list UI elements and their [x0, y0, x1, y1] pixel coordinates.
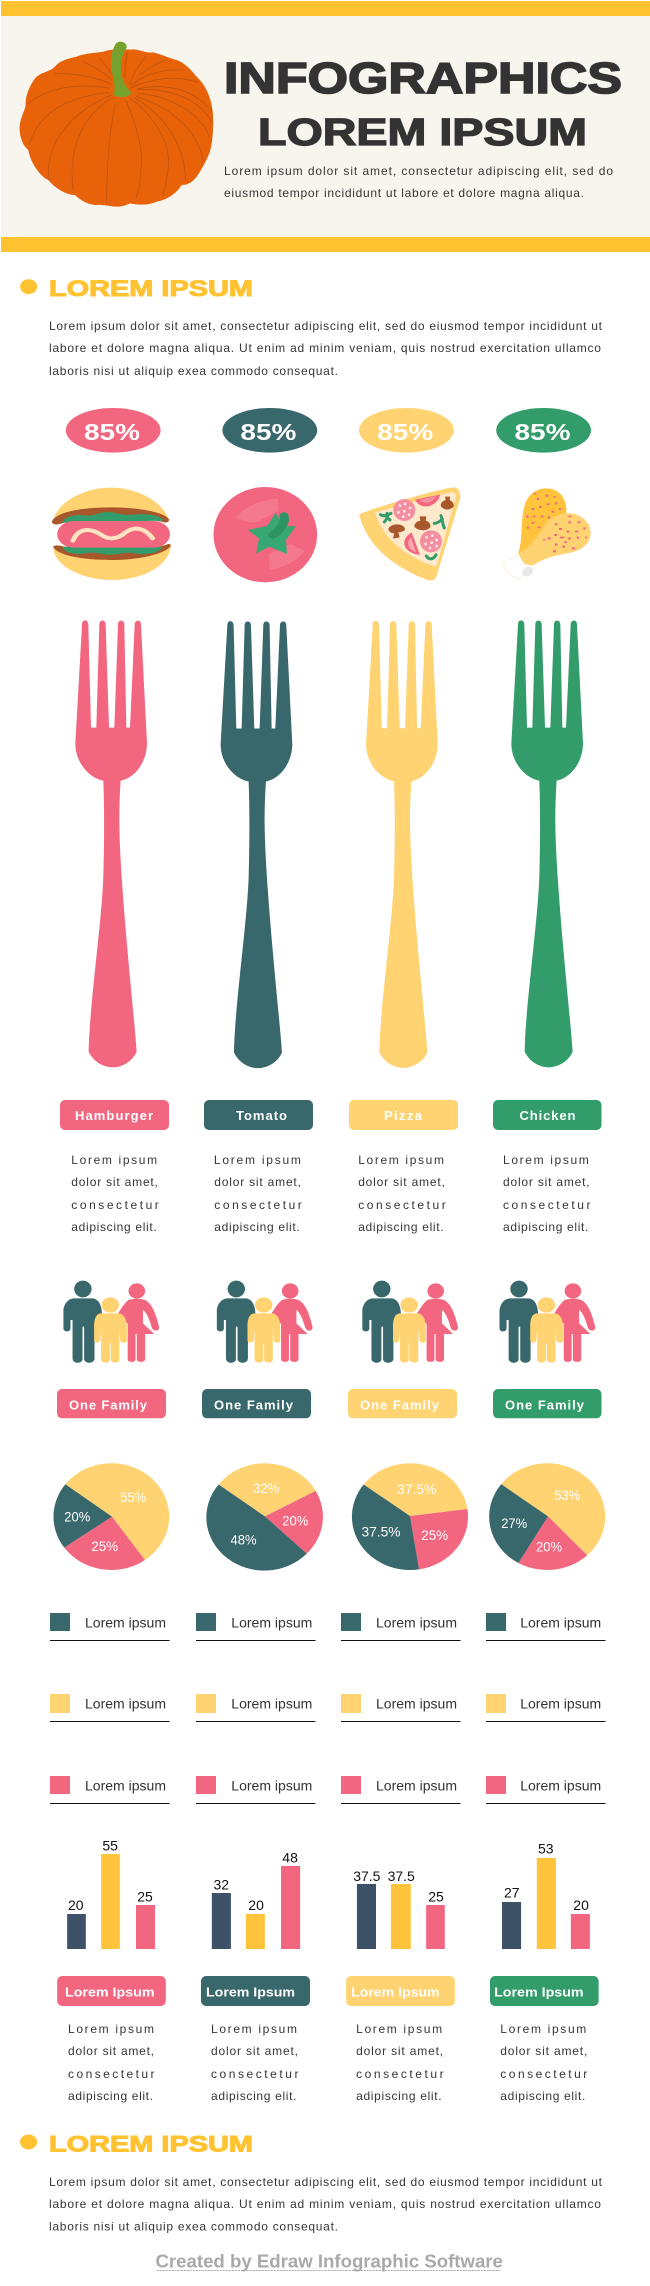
- pie chart 3: [352, 1463, 468, 1570]
- header text block: Lorem ipsum dolor sit amet, consectetur adipiscing elit, sed do: [224, 164, 613, 178]
- bar chart 2: 48: [282, 1850, 298, 1866]
- percentage badges: 85%: [240, 419, 296, 445]
- chart description: column 1: [68, 2022, 154, 2103]
- chart description: column 4: adipiscing elit.: [500, 2089, 585, 2103]
- legend row 1: Lorem ipsum: [85, 1614, 166, 1630]
- food description: column 3: consectetur: [358, 1198, 446, 1212]
- chart description: column 3: dolor sit amet,: [356, 2044, 443, 2058]
- chart label 3: Lorem Ipsum: [351, 1985, 440, 2000]
- bar chart 1: 20: [68, 1897, 84, 1913]
- bar chart 2: [212, 1850, 300, 1949]
- legend row 1: [50, 1613, 606, 1640]
- family label 2: One Family: [214, 1397, 294, 1412]
- pie chart 2: 32%: [253, 1480, 279, 1496]
- food description: column 4: consectetur: [503, 1198, 590, 1212]
- bar chart 3: 37.5: [353, 1868, 381, 1884]
- intro text block: laboris nisi ut aliquip exea commodo consequat.: [49, 364, 338, 378]
- chart description: column 1: Lorem ipsum: [68, 2022, 154, 2036]
- section heading: bottom: LOREM IPSUM: [49, 2131, 253, 2156]
- percentage badges: 85%: [377, 419, 433, 445]
- food label: Hamburger: Hamburger: [75, 1108, 153, 1123]
- icon: pumpkin: [20, 42, 213, 207]
- percentage badges: 85%: [84, 419, 140, 445]
- chart description: column 1: dolor sit amet,: [68, 2044, 154, 2058]
- bar chart 3: 25: [428, 1889, 444, 1905]
- percentage badges: 85%: [514, 419, 570, 445]
- food description: column 3: adipiscing elit.: [358, 1220, 444, 1234]
- pie chart 2: [206, 1463, 323, 1571]
- fork: hamburger: [75, 620, 147, 1067]
- chart description: column 4: Lorem ipsum: [500, 2022, 586, 2036]
- family label 2: [202, 1389, 311, 1418]
- food description: column 4: adipiscing elit.: [503, 1220, 588, 1234]
- icon: hamburger: [52, 488, 171, 580]
- title: INFOGRAPHICS: [224, 54, 622, 103]
- food description: column 4: dolor sit amet,: [503, 1175, 590, 1189]
- legend row 2: Lorem ipsum: [85, 1696, 166, 1712]
- food description: column 3: [358, 1153, 446, 1234]
- family label 3: [348, 1389, 457, 1418]
- chart description: column 2: dolor sit amet,: [211, 2044, 298, 2058]
- food description: column 1: adipiscing elit.: [71, 1220, 157, 1234]
- closing text block: labore et dolore magna aliqua. Ut enim ad minim veniam, quis nostrud exercitation ullamco: [49, 2197, 601, 2211]
- legend row 3: Lorem ipsum: [85, 1778, 166, 1794]
- percentage badges: [66, 408, 591, 453]
- chart description: column 3: [356, 2022, 444, 2103]
- food description: column 2: dolor sit amet,: [214, 1175, 301, 1189]
- pie chart 1: 55%: [120, 1489, 146, 1505]
- food description: column 1: Lorem ipsum: [71, 1153, 157, 1167]
- icon: tomato: [213, 487, 317, 582]
- footer credit: Created by Edraw Infographic Software: [156, 2251, 503, 2271]
- intro text block: Lorem ipsum dolor sit amet, consectetur adipiscing elit, sed do eiusmod tempor incididunt ut: [49, 319, 603, 333]
- bar chart 2: 20: [248, 1897, 264, 1913]
- chart description: column 2: Lorem ipsum: [211, 2022, 297, 2036]
- food label: Tomato: [204, 1100, 313, 1130]
- pie chart 4: 20%: [536, 1539, 562, 1555]
- subtitle: LOREM IPSUM: [258, 112, 587, 154]
- family label 3: One Family: [360, 1397, 440, 1412]
- pie chart 4: 53%: [554, 1487, 580, 1503]
- food label: Pizza: [349, 1100, 458, 1130]
- icon: family 3: [362, 1281, 458, 1363]
- legend row 3: Lorem ipsum: [231, 1778, 312, 1794]
- legend row 1: Lorem ipsum: [376, 1614, 457, 1630]
- chart label 3: [346, 1976, 455, 2006]
- pie chart 4: 27%: [501, 1515, 527, 1531]
- legend row 2: Lorem ipsum: [231, 1696, 312, 1712]
- bar chart 1: [67, 1838, 155, 1949]
- pie chart 1: [53, 1463, 169, 1570]
- legend row 3: Lorem ipsum: [376, 1778, 457, 1794]
- bar chart 2: 32: [214, 1876, 229, 1892]
- bar chart 4: [502, 1840, 590, 1949]
- bar chart 4: 20: [573, 1897, 589, 1913]
- chart label 1: Lorem Ipsum: [65, 1985, 154, 2000]
- chart description: column 4: [500, 2022, 587, 2103]
- icon: family 1: [63, 1281, 159, 1363]
- food label: Chicken: [493, 1100, 602, 1130]
- fork: tomato: [221, 621, 292, 1068]
- bar chart 3: [353, 1868, 445, 1949]
- chart description: column 2: adipiscing elit.: [211, 2089, 296, 2103]
- icon: family 2: [217, 1281, 313, 1363]
- pie chart 1: 20%: [64, 1509, 90, 1525]
- chart label 4: [490, 1976, 599, 2006]
- food description: column 3: Lorem ipsum: [358, 1153, 444, 1167]
- food description: column 2: adipiscing elit.: [214, 1220, 300, 1234]
- bar chart 1: 55: [102, 1838, 118, 1854]
- chart description: column 2: [211, 2022, 298, 2103]
- legend row 1: Lorem ipsum: [231, 1614, 312, 1630]
- icon: family 4: [500, 1281, 595, 1363]
- family label 1: [57, 1389, 166, 1418]
- icon: pizza slice: [359, 487, 460, 580]
- food label: Tomato: Tomato: [236, 1108, 287, 1123]
- food description: column 4: Lorem ipsum: [503, 1153, 589, 1167]
- food description: column 2: [214, 1153, 302, 1234]
- intro text block: labore et dolore magna aliqua. Ut enim ad minim veniam, quis nostrud exercitation ullamco: [49, 341, 601, 355]
- legend row 2: [50, 1694, 606, 1722]
- food label: Chicken: Chicken: [520, 1108, 576, 1123]
- legend row 1: Lorem ipsum: [520, 1614, 601, 1630]
- legend row 3: [50, 1776, 606, 1804]
- bar chart 4: 53: [538, 1840, 554, 1856]
- family label 4: [493, 1389, 602, 1418]
- chart label 1: [57, 1976, 166, 2006]
- pie chart 3: 25%: [421, 1527, 448, 1543]
- pie chart 1: 25%: [91, 1538, 118, 1554]
- food description: column 1: dolor sit amet,: [71, 1175, 158, 1189]
- chart description: column 2: consectetur: [211, 2067, 298, 2081]
- chart label 2: Lorem Ipsum: [206, 1985, 295, 2000]
- family label 4: One Family: [505, 1397, 585, 1412]
- chart description: column 3: adipiscing elit.: [356, 2089, 442, 2103]
- fork: pizza: [366, 621, 438, 1068]
- food description: column 2: Lorem ipsum: [214, 1153, 301, 1167]
- legend row 2: Lorem ipsum: [520, 1696, 601, 1712]
- food description: column 1: consectetur: [71, 1198, 159, 1212]
- food label: Hamburger: [60, 1100, 169, 1130]
- section heading: bottom: [20, 2131, 253, 2156]
- closing text block: laboris nisi ut aliquip exea commodo consequat.: [49, 2220, 338, 2234]
- header text block: eiusmod tempor incididunt ut labore et dolore magna aliqua.: [224, 186, 584, 200]
- chart description: column 3: consectetur: [356, 2067, 444, 2081]
- food description: column 2: consectetur: [214, 1198, 302, 1212]
- bar chart 4: 27: [504, 1885, 520, 1901]
- pie chart 2: 20%: [282, 1513, 308, 1529]
- bar chart 3: 37.5: [388, 1868, 415, 1884]
- fork: chicken: [511, 620, 583, 1067]
- chart description: column 4: consectetur: [500, 2067, 587, 2081]
- header panel: [1, 1, 650, 252]
- family label 1: One Family: [69, 1397, 148, 1412]
- legend row 2: Lorem ipsum: [376, 1696, 457, 1712]
- chart description: column 1: consectetur: [68, 2067, 154, 2081]
- chart description: column 4: dolor sit amet,: [500, 2044, 587, 2058]
- food description: column 3: dolor sit amet,: [358, 1175, 445, 1189]
- closing text block: Lorem ipsum dolor sit amet, consectetur adipiscing elit, sed do eiusmod tempor incididunt ut: [49, 2175, 603, 2189]
- pie chart 3: 37.5%: [397, 1481, 436, 1497]
- pie chart 3: 37.5%: [362, 1524, 400, 1540]
- chart description: column 3: Lorem ipsum: [356, 2022, 442, 2036]
- intro text block: [49, 319, 603, 378]
- pie chart 2: 48%: [230, 1532, 256, 1548]
- food description: column 1: [71, 1153, 159, 1234]
- closing text block: [49, 2175, 603, 2234]
- food description: column 4: [503, 1153, 590, 1234]
- icon: chicken legs: [504, 488, 591, 579]
- chart description: column 1: adipiscing elit.: [68, 2089, 153, 2103]
- bar chart 1: 25: [137, 1889, 153, 1905]
- legend row 3: Lorem ipsum: [520, 1778, 601, 1794]
- section heading: top: LOREM IPSUM: [49, 276, 253, 301]
- chart label 2: [201, 1976, 310, 2006]
- food label: Pizza: Pizza: [384, 1108, 423, 1123]
- section heading: top: [20, 276, 253, 301]
- pie chart 4: [489, 1463, 605, 1570]
- chart label 4: Lorem Ipsum: [494, 1985, 584, 2000]
- header text block: [224, 164, 613, 200]
